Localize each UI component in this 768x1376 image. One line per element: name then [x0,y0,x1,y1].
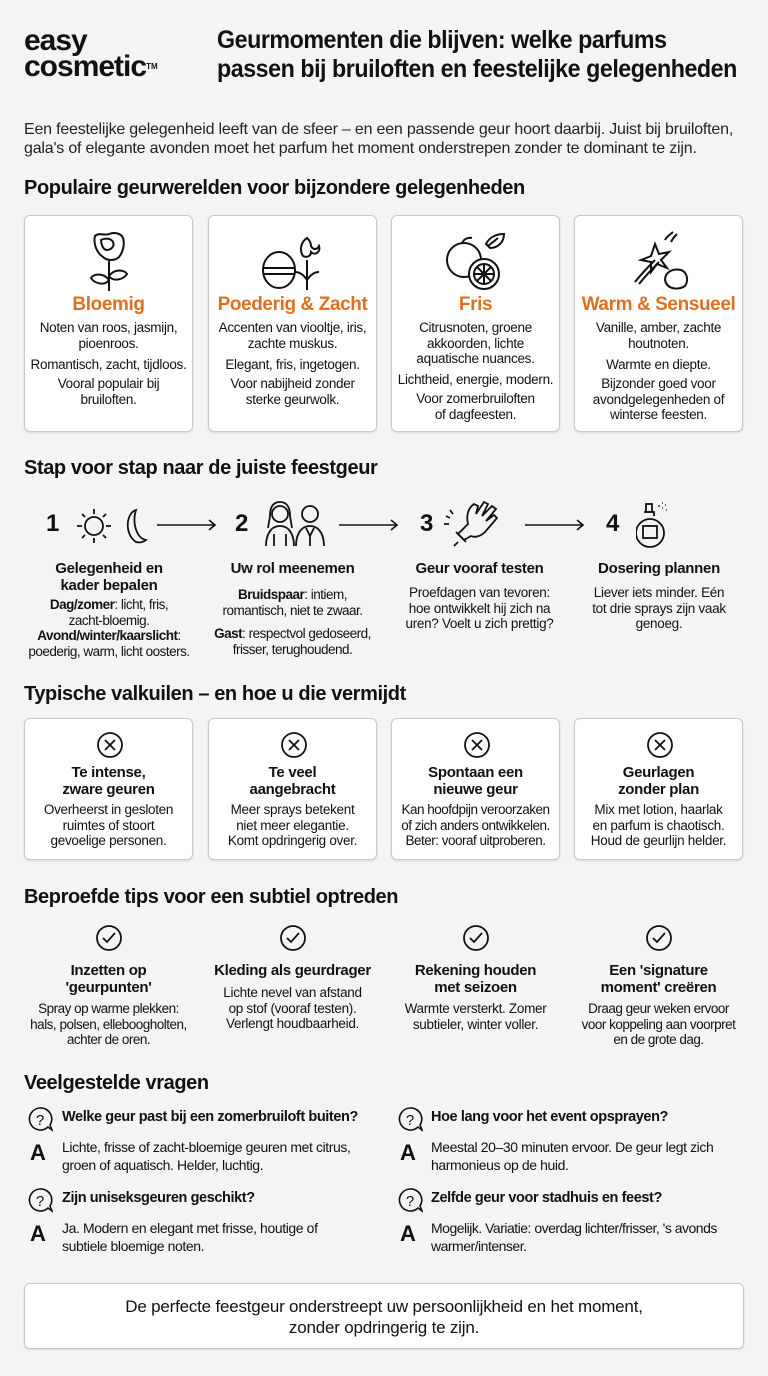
intro text: gala's of elegante avonden moet het parfum het moment onderstrepen zonder te dominant te zijn. [24,140,697,157]
faq 4: Zelfde geur voor stadhuis en feest? [431,1190,662,1206]
panel: valkuil 4: en parfum is chaotisch. [593,818,724,832]
faq 3: A [30,1221,46,1246]
panel: Poederig & Zacht [208,215,377,432]
panel: valkuil 1: zware geuren [62,781,155,798]
heading: geurwerelden: Populaire geurwerelden voor bijzondere gelegenheden [24,177,525,199]
panel: Warm & Sensueel: houtnoten. [628,336,689,350]
step 4 [592,502,726,631]
faq 3: Zijn uniseksgeuren geschikt? [62,1190,255,1206]
panel: valkuil 4: Houd de geurlijn helder. [591,833,726,848]
icon: cross [97,732,123,758]
panel: Fris: akkoorden, lichte [427,336,524,350]
logo: easy [24,24,87,57]
panel: Warm & Sensueel: Bijzonder goed voor [601,376,716,391]
panel: Bloemig: bruiloften. [80,392,136,406]
panel: valkuil 4: Mix met lotion, haarlak [594,802,723,817]
panel: Poederig & Zacht: Accenten van viooltje, iris, [219,320,366,335]
logo: cosmeticTM [24,50,158,83]
heading: valkuilen: Typische valkuilen – en hoe u die vermijdt [24,683,406,705]
panel: Warm & Sensueel [574,215,743,432]
panel: Fris: Voor zomerbruiloften [416,391,535,406]
icon: citrus [446,233,505,290]
faq 3: Ja. Modern en elegant met frisse, houtige of [62,1220,318,1236]
panel: Poederig & Zacht: sterke geurwolk. [246,392,339,406]
panel: Bloemig [24,215,193,432]
footer callout [24,1283,744,1349]
faq 4: Mogelijk. Variatie: overdag lichter/frisser, 's avonds [431,1220,717,1236]
faq 4: A [400,1221,416,1246]
tip 1: hals, polsen, elleboogholten, [30,1016,187,1032]
panel: valkuil 1: gevoelige personen. [51,833,166,848]
step 2: romantisch, niet te zwaar. [222,602,363,618]
title: Geurmomenten die blijven: welke parfums [217,26,667,54]
step 4: Dosering plannen [598,560,720,577]
icon: perfume bottle [636,502,667,548]
logo [24,24,158,83]
icon: sun and moon [77,508,148,544]
faq 4 [398,1188,717,1254]
tip 3: Warmte versterkt. Zomer [405,1001,546,1016]
step 2: Uw rol meenemen [231,560,354,577]
faq 2 [398,1107,713,1173]
panel: valkuil 3: nieuwe geur [433,781,518,798]
panel: valkuil 2: Meer sprays betekent [231,802,354,817]
step 2: 2 [235,510,248,537]
tip 1: 'geurpunten' [65,979,152,996]
panel: Fris: Citrusnoten, groene [419,320,532,335]
faq 1: Lichte, frisse of zacht-bloemige geuren met citrus, [62,1139,351,1155]
tip 3 [404,925,547,1032]
arrow 3 [525,519,584,531]
heading: FAQ: Veelgestelde vragen [24,1072,209,1094]
step 1: Avond/winter/kaarslicht: [37,628,181,643]
icon: question bubble [28,1107,53,1132]
panel: Warm & Sensueel: Vanille, amber, zachte [596,320,721,335]
step 3: 3 [420,510,433,537]
icon: check [280,925,306,951]
step 2: frisser, terughoudend. [233,642,352,656]
panel: valkuil 1: ruimtes of stoort [63,818,154,832]
tip 4: en de grote dag. [613,1032,704,1047]
panel: Bloemig: Noten van roos, jasmijn, [40,320,177,335]
tip 3: subtieler, winter voller. [413,1016,538,1032]
panel: valkuil 2 [208,718,377,860]
panel: Fris: Fris [459,294,492,315]
panel: Warm & Sensueel: winterse feesten. [610,407,707,422]
icon: check [96,925,122,951]
tip 4: voor koppeling aan voorpret [582,1016,735,1032]
panel: valkuil 4: Geurlagen [623,764,694,781]
panel: valkuil 2: aangebracht [250,781,335,798]
title: passen bij bruiloften en feestelijke gelegenheden [217,55,737,83]
step 3: Proefdagen van tevoren: [409,585,550,600]
icon: check [463,925,489,951]
panel: valkuil 3: Spontaan een [428,764,523,781]
panel: valkuil 3: Beter: vooraf uitproberen. [405,833,546,848]
panel: Bloemig: Romantisch, zacht, tijdloos. [31,357,186,372]
panel: Poederig & Zacht: Voor nabijheid zonder [230,376,355,391]
panel: valkuil 3: Kan hoofdpijn veroorzaken [401,802,550,817]
step 1: poederig, warm, licht oosters. [28,644,190,658]
footer callout: zonder opdringerig te zijn. [289,1318,479,1337]
icon: question bubble [398,1188,423,1213]
panel: Warm & Sensueel: Warmte en diepte. [606,357,711,372]
icon: question bubble: ? [406,1112,414,1129]
step 1: kader bepalen [60,577,157,594]
panel: valkuil 1: Overheerst in gesloten [44,802,173,817]
intro text [24,121,733,157]
panel: valkuil 2: Te veel [269,764,316,781]
tip 3: met seizoen [434,979,517,996]
step 2: Bruidspaar: intiem, [238,587,347,602]
heading: tips: Beproefde tips voor een subtiel optreden [24,886,398,908]
faq 3: subtiele bloemige noten. [62,1238,204,1254]
tip 2 [214,925,371,1031]
heading: stappen: Stap voor stap naar de juiste feestgeur [24,457,377,479]
step 4: 4 [606,510,619,537]
panel: Fris: aquatische nuances. [416,351,535,366]
faq 2: A [400,1140,416,1165]
step 4: genoeg. [636,616,682,631]
icon: question bubble [28,1188,53,1213]
intro text: Een feestelijke gelegenheid leeft van de sfeer – en een passende geur hoort daarbij. Juist bij bruiloften, [24,121,733,138]
panel: valkuil 4: zonder plan [618,781,699,798]
tip 2: Kleding als geurdrager [214,962,371,979]
step 4: tot drie sprays zijn vaak [592,600,726,616]
step 4: Liever iets minder. Eén [594,585,724,600]
panel: valkuil 3: of zich anders ontwikkelen. [401,818,550,832]
panel: Bloemig: pioenroos. [78,336,139,350]
faq 1 [28,1107,358,1173]
tip 1: Spray op warme plekken: [38,1001,179,1016]
panel: Fris: of dagfeesten. [435,406,516,422]
step 1 [28,508,190,659]
faq 1: groen of aquatisch. Helder, luchtig. [62,1157,263,1173]
faq 2: Hoe lang voor het event opsprayen? [431,1109,668,1125]
icon: couple [265,501,325,546]
faq 2: harmonieus op de huid. [431,1157,569,1173]
tip 4: Draag geur weken ervoor [588,1001,729,1016]
panel: Fris: Lichtheid, energie, modern. [398,372,553,387]
icon: rose [90,232,128,291]
panel: valkuil 3 [391,718,560,860]
footer callout: De perfecte feestgeur onderstreept uw persoonlijkheid en het moment, [125,1297,643,1316]
faq 1: A [30,1140,46,1165]
step 3 [405,500,554,631]
step 2 [214,501,371,657]
step 3: hoe ontwikkelt hij zich na [409,600,550,616]
title [217,26,737,83]
faq 1: Welke geur past bij een zomerbruiloft buiten? [62,1109,358,1125]
step 1: Gelegenheid en [55,560,163,577]
panel: valkuil 4 [574,718,743,860]
icon: cross [464,732,490,758]
icon: question bubble: ? [36,1193,44,1210]
tip 1 [30,925,187,1047]
tip 2: Lichte nevel van afstand [223,985,362,1000]
tip 4: Een 'signature [609,962,708,979]
step 1: Dag/zomer: licht, fris, [50,597,168,612]
tip 1: achter de oren. [67,1032,150,1047]
tip 2: op stof (vooraf testen). [229,1000,356,1016]
tip 3: Rekening houden [415,962,536,979]
icon: question bubble [398,1107,423,1132]
arrow 1 [157,519,216,531]
panel: valkuil 2: niet meer elegantie. [236,818,349,832]
icon: cross [647,732,673,758]
panel: valkuil 1 [24,718,193,860]
tip 2: Verlengt houdbaarheid. [226,1016,359,1031]
tip 4 [582,925,736,1047]
icon: wrist [444,500,498,547]
icon: powder and iris [262,236,320,290]
tip 1: Inzetten op [71,962,146,979]
step 2: Gast: respectvol gedoseerd, [214,626,371,641]
tip 4: moment' creëren [601,979,716,996]
panel: Poederig & Zacht: Elegant, fris, ingetogen. [225,357,360,372]
panel: Poederig & Zacht: Poederig & Zacht [218,294,367,315]
arrow 2 [339,519,398,531]
icon: vanilla and amber [634,231,688,290]
step 1: zacht-bloemig. [69,612,149,628]
icon: check [646,925,672,951]
panel: Fris [391,215,560,432]
step 3: uren? Voelt u zich prettig? [405,616,554,631]
faq 2: Meestal 20–30 minuten ervoor. De geur legt zich [431,1139,713,1155]
step 3: Geur vooraf testen [416,560,543,577]
icon: cross [281,732,307,758]
panel: valkuil 2: Komt opdringerig over. [228,833,357,848]
panel: Warm & Sensueel: Warm & Sensueel [582,294,735,315]
icon: question bubble: ? [36,1112,44,1129]
panel: Poederig & Zacht: zachte muskus. [248,336,337,350]
faq 3 [28,1188,318,1254]
step 1: 1 [46,510,59,537]
faq 4: warmer/intenser. [431,1238,526,1254]
panel: valkuil 1: Te intense, [72,764,145,781]
panel: Bloemig: Vooral populair bij [58,376,159,391]
panel: Bloemig: Bloemig [72,294,145,315]
panel: Warm & Sensueel: avondgelegenheden of [593,392,724,406]
icon: question bubble: ? [406,1193,414,1210]
